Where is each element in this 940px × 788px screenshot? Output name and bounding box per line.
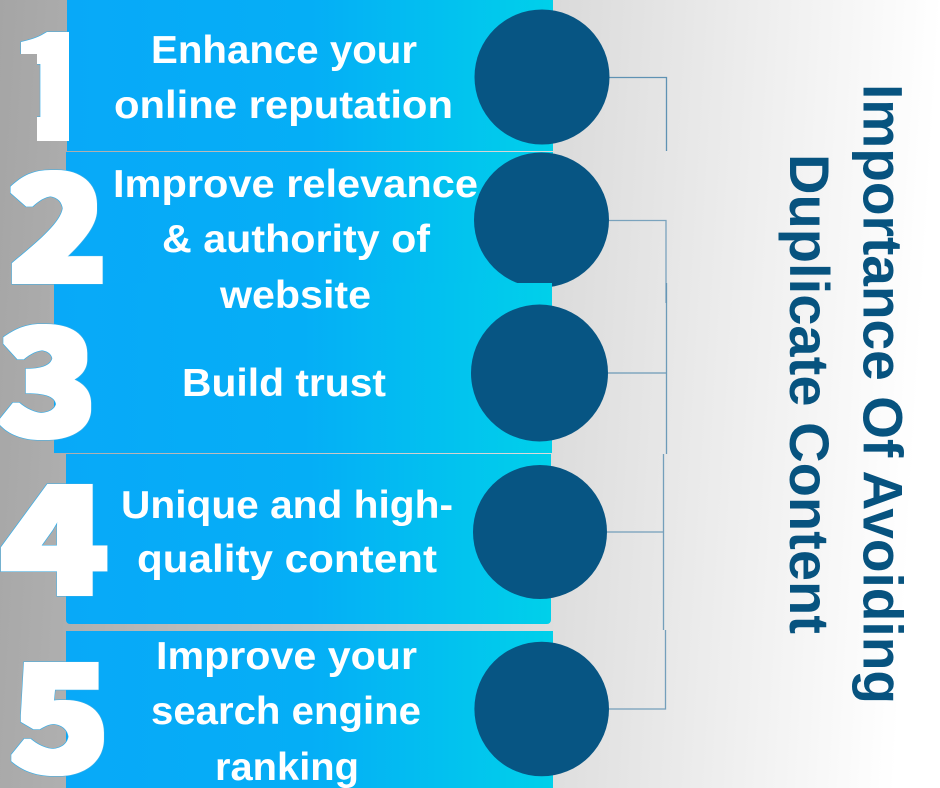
panel 3 xyxy=(54,283,552,453)
circle 2 xyxy=(474,152,609,288)
text: item 2: website xyxy=(219,274,371,317)
text: item 5: Improve your xyxy=(156,635,417,678)
number 3: 3 xyxy=(0,267,97,478)
panel 2 xyxy=(66,152,553,284)
connector: item 2 xyxy=(609,220,666,303)
connector: item 5 xyxy=(609,630,666,709)
circle 5 xyxy=(474,642,609,776)
text: item 4 xyxy=(121,484,453,581)
number 4: 4 xyxy=(0,425,109,636)
number 2: 2 xyxy=(8,113,108,324)
text: item 4: quality content xyxy=(137,538,437,581)
circle 1 xyxy=(474,10,610,144)
panel 5 xyxy=(66,631,553,788)
title: Importance Of Avoiding xyxy=(852,84,914,704)
text: item 3: Build trust xyxy=(182,362,386,405)
panel 1 xyxy=(67,0,553,151)
connector: item 4 xyxy=(607,454,664,630)
title xyxy=(778,84,914,704)
connector: item 1 xyxy=(609,78,666,151)
connector: item 3 xyxy=(608,283,666,454)
circle 4 xyxy=(473,465,607,599)
text: item 4: Unique and high- xyxy=(121,484,453,527)
panel 4 xyxy=(66,454,551,624)
title: Duplicate Content xyxy=(778,154,841,634)
text: item 5 xyxy=(151,635,421,788)
text: item 2 xyxy=(113,163,478,317)
text: item 1: online reputation xyxy=(114,84,453,127)
text: item 5: ranking xyxy=(215,746,359,788)
circle 3 xyxy=(471,304,608,442)
text: item 5: search engine xyxy=(151,690,421,733)
text: item 2: & authority of xyxy=(162,218,431,261)
text: item 1 xyxy=(114,29,453,127)
text: item 1: Enhance your xyxy=(151,29,417,72)
text: item 2: Improve relevance xyxy=(113,163,478,206)
